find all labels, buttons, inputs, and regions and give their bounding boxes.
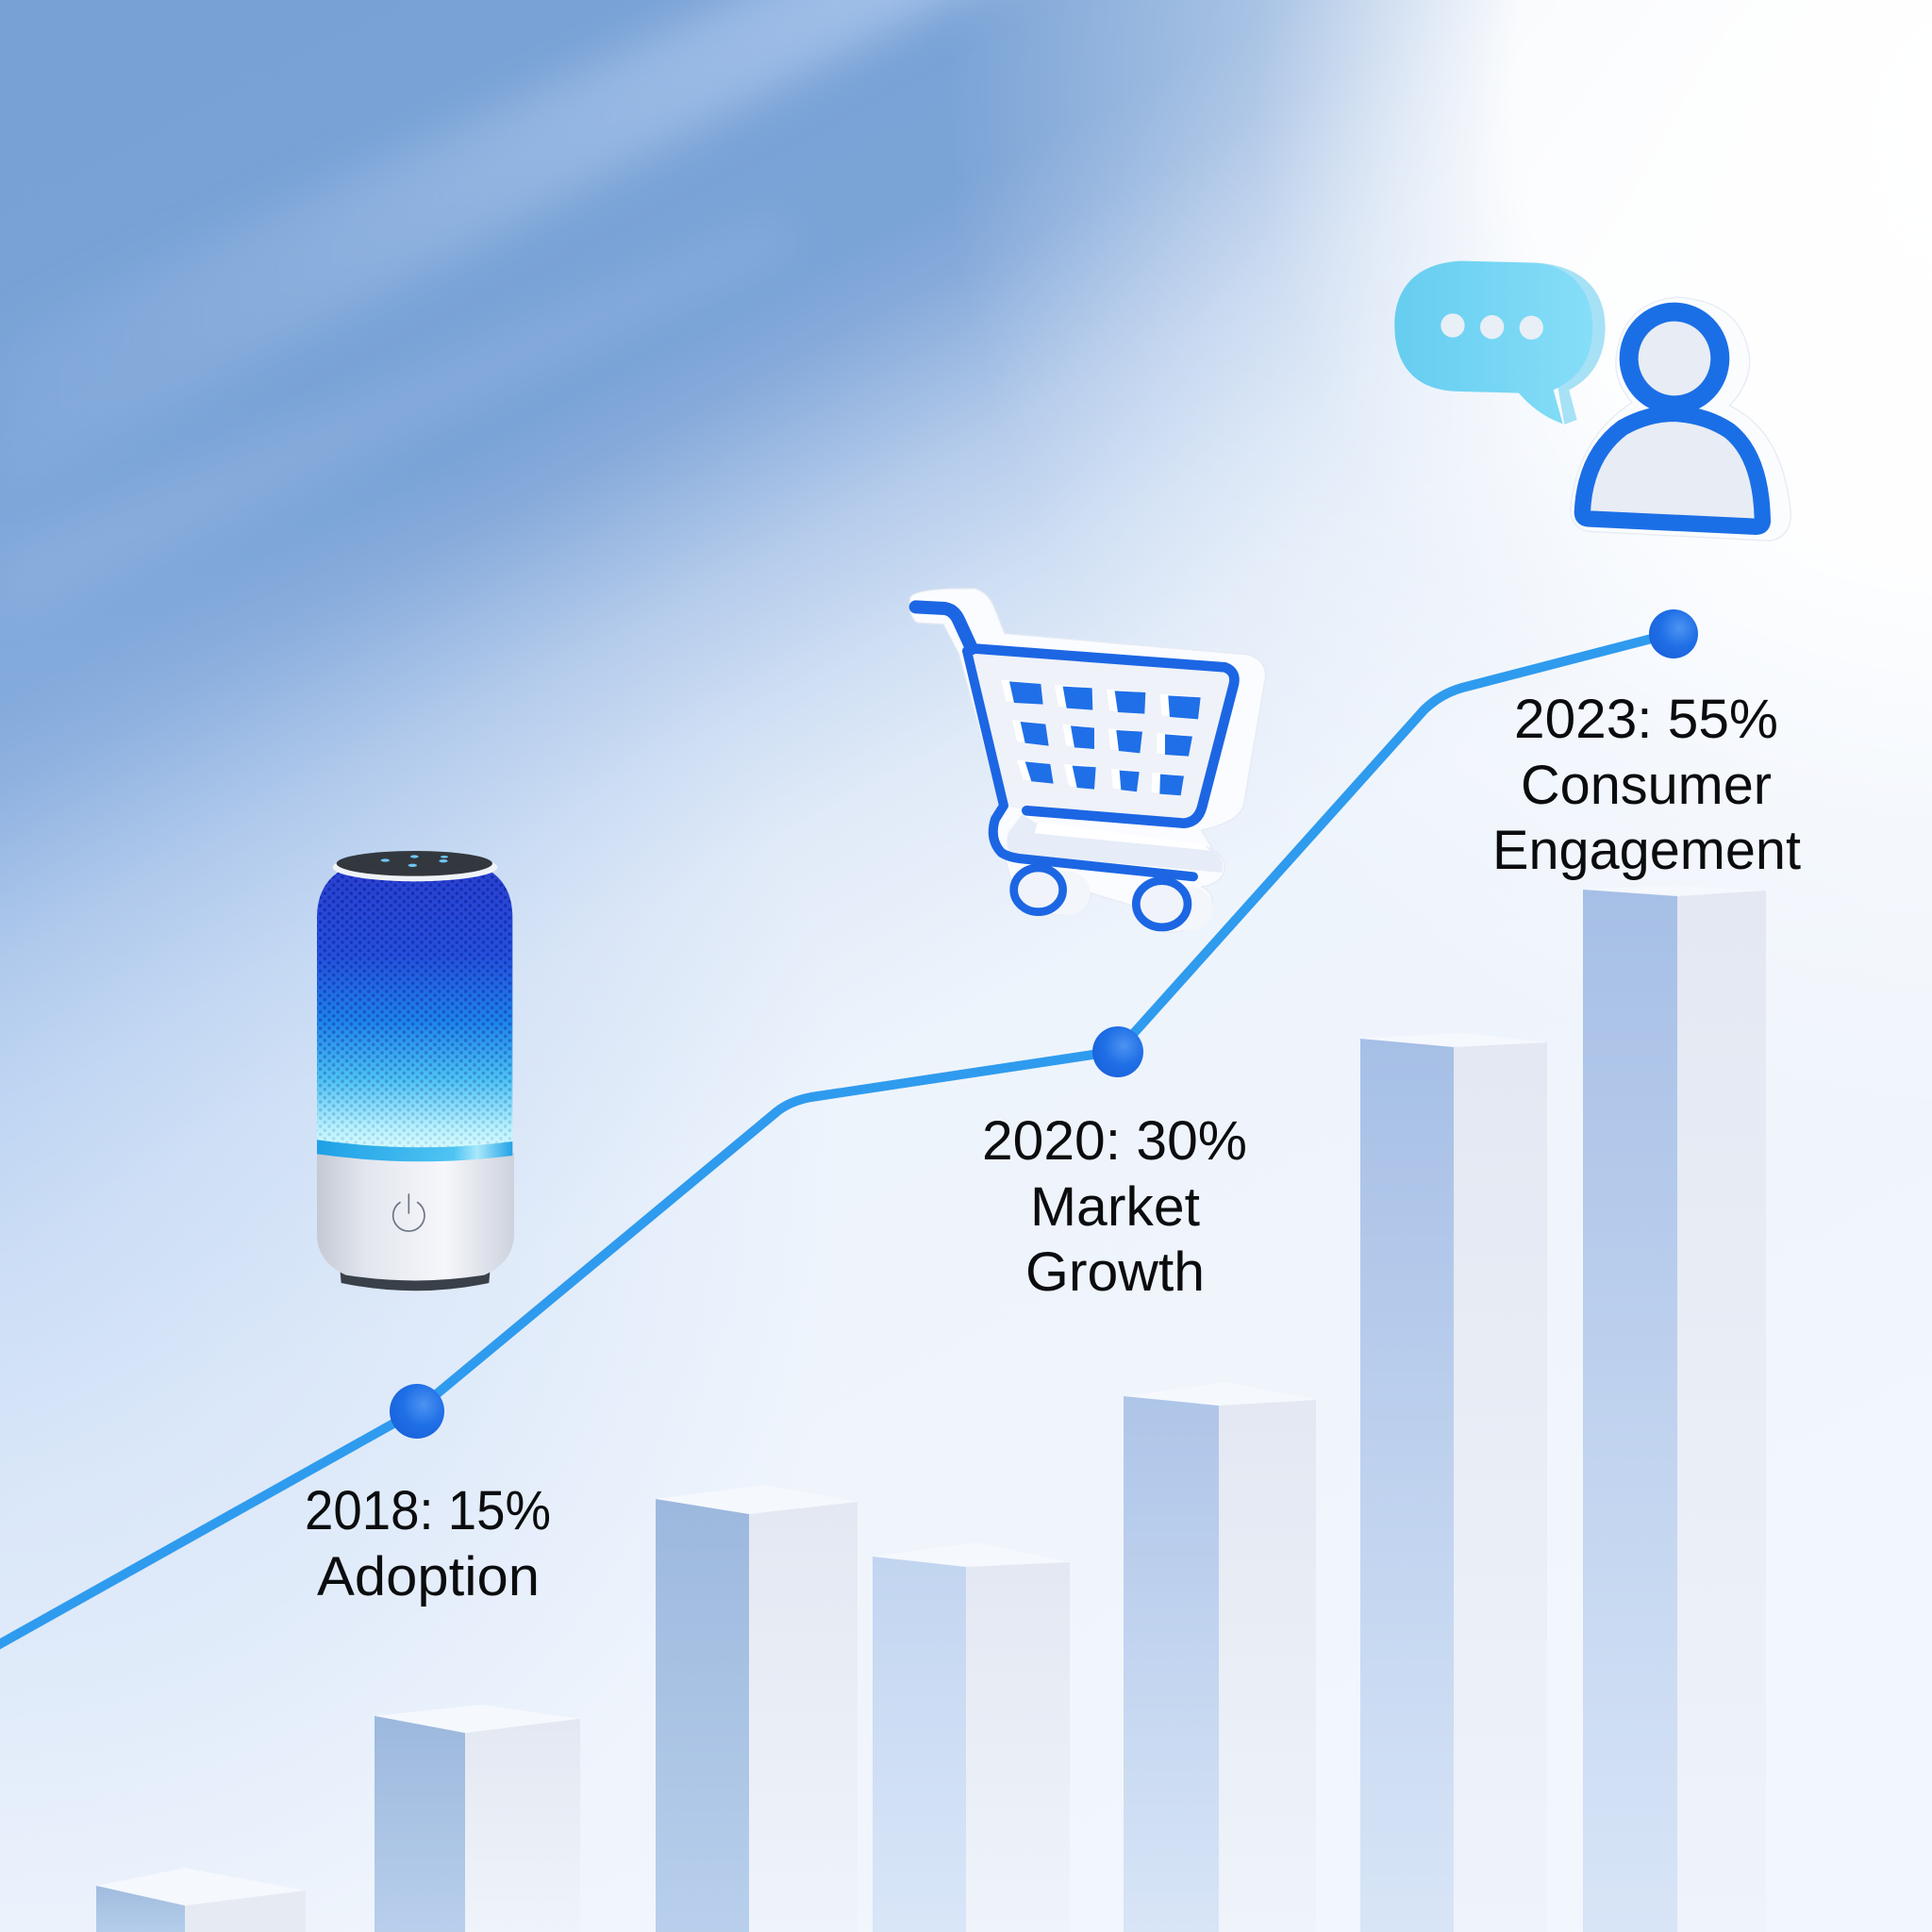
bar 7	[1583, 885, 1766, 1932]
icon: smart speaker	[314, 851, 516, 1291]
data point 2018	[390, 1384, 444, 1439]
trend line	[0, 609, 1698, 1647]
cart white extrusion	[909, 589, 1266, 932]
label: 2023 consumer engagement: Consumer	[1521, 755, 1772, 816]
label: 2020 market growth: Growth	[1025, 1241, 1205, 1303]
power symbol	[393, 1194, 425, 1231]
icon: shopping cart	[909, 589, 1266, 932]
label: 2023 consumer engagement	[1492, 689, 1801, 881]
bar 5	[1124, 1382, 1316, 1932]
label: 2018 adoption: Adoption	[317, 1546, 540, 1607]
data point 2023	[1649, 609, 1698, 658]
label: 2020 market growth: Market	[1030, 1176, 1200, 1238]
label: 2023 consumer engagement: Engagement	[1492, 820, 1801, 881]
label: 2018 adoption: 2018: 15%	[305, 1480, 551, 1541]
data point 2020	[1092, 1026, 1143, 1077]
cart outline	[916, 607, 1234, 876]
label: 2020 market growth	[982, 1110, 1247, 1303]
bar 2	[375, 1705, 580, 1932]
icon: user	[1571, 297, 1790, 541]
lower rack	[1007, 814, 1223, 873]
bar 6	[1360, 1033, 1547, 1932]
bar 3	[656, 1485, 858, 1932]
user body	[1582, 413, 1762, 526]
user head	[1629, 312, 1720, 405]
bar 1	[96, 1868, 306, 1932]
user white extrusion	[1571, 297, 1790, 541]
icon: chat bubble	[1394, 261, 1606, 425]
bar 4	[873, 1542, 1070, 1932]
wheels	[1014, 868, 1063, 912]
basket face	[970, 653, 1235, 824]
label: 2020 market growth: 2020: 30%	[982, 1110, 1247, 1172]
chat dots	[1441, 313, 1543, 340]
basket holes	[1001, 680, 1201, 795]
bar chart	[96, 885, 1766, 1932]
label: 2018 adoption	[305, 1480, 551, 1607]
label: 2023 consumer engagement: 2023: 55%	[1514, 689, 1778, 750]
